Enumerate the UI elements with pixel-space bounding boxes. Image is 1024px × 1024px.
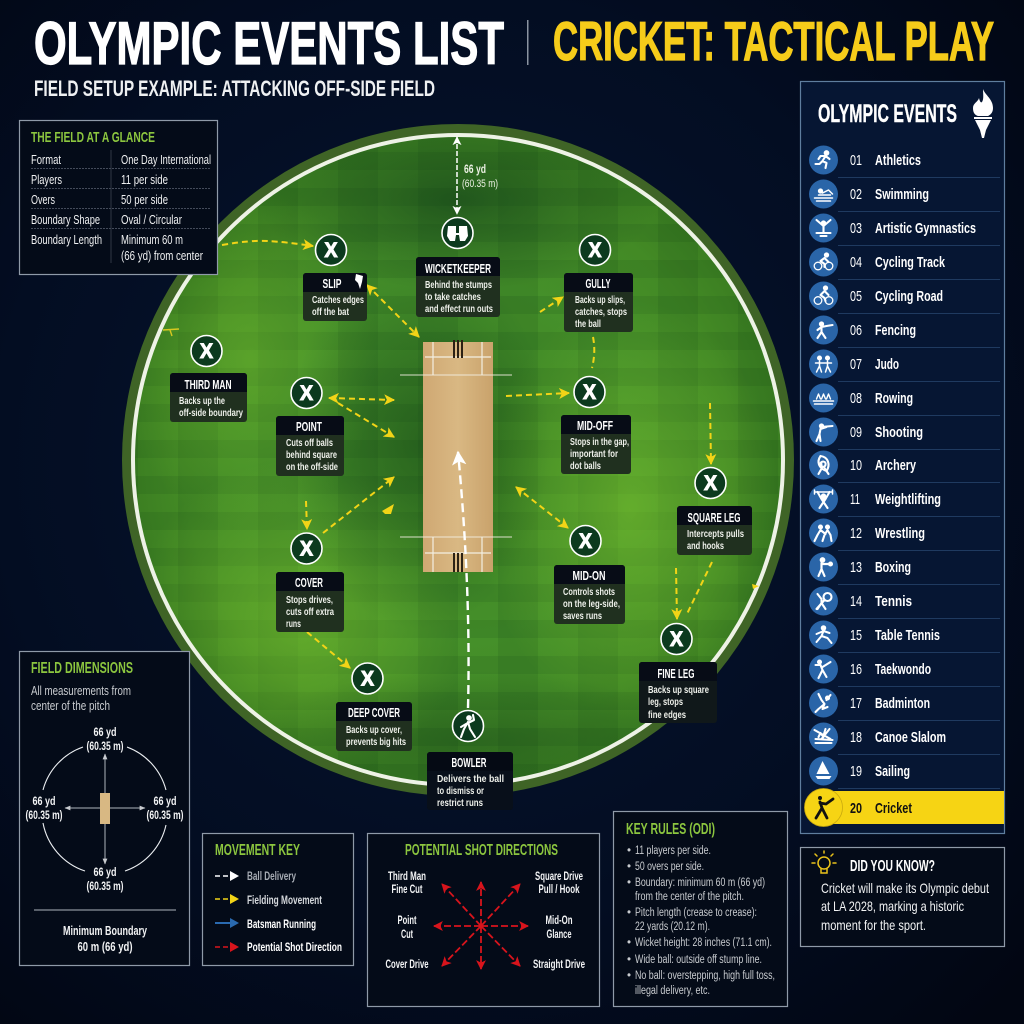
panel: key rules: Wicket height: 28 inches (71.1 cm). xyxy=(635,937,772,949)
panel: potential shot directions: POTENTIAL SHOT DIRECTIONS xyxy=(405,842,558,859)
fielder: fine leg xyxy=(639,624,717,723)
fielder: cover: cuts off extra xyxy=(286,606,334,618)
panel: key rules: • xyxy=(627,877,631,889)
fielder: cover: runs xyxy=(286,618,301,630)
event: table tennis: 15 xyxy=(850,627,862,644)
panel: the field at a glance: Oval / Circular xyxy=(121,213,182,227)
panel: the field at a glance: One Day International xyxy=(121,153,211,167)
panel: the field at a glance: (66 yd) from center xyxy=(121,249,203,263)
panel: key rules: • xyxy=(627,907,631,919)
fielder: square leg: X xyxy=(704,472,717,495)
fielder: point: behind square xyxy=(286,449,337,461)
event: fencing: Fencing xyxy=(875,322,916,339)
panel: key rules: KEY RULES (ODI) xyxy=(626,821,715,838)
fielder: fine leg: leg, stops xyxy=(648,696,683,708)
fielder: bowler xyxy=(427,710,513,810)
dimension diagram: (60.35 m) xyxy=(26,810,63,822)
event: fencing xyxy=(809,316,916,344)
fielder: bowler: restrict runs xyxy=(437,797,483,809)
fielder: point: Cuts off balls xyxy=(286,437,333,449)
panel: potential shot directions: Mid-On xyxy=(546,913,572,927)
fielder: slip: off the bat xyxy=(312,306,349,318)
fielder: bowler: to dismiss or xyxy=(437,785,484,797)
event: shooting: 09 xyxy=(850,424,862,441)
dimension diagram: Minimum Boundary xyxy=(63,924,147,938)
title xyxy=(34,10,994,77)
ball delivery arrow xyxy=(458,452,469,708)
fielder: slip xyxy=(303,234,367,321)
event: tennis xyxy=(809,586,912,616)
panel: key rules: • xyxy=(627,845,631,857)
icon: olympic torch xyxy=(973,89,993,138)
panel: key rules: • xyxy=(627,861,631,873)
event: fencing: 06 xyxy=(850,322,862,339)
fielder: gully: X xyxy=(588,239,602,262)
event: badminton: 17 xyxy=(850,695,862,712)
event: wrestling xyxy=(809,518,925,548)
panel: key rules: • xyxy=(627,970,631,982)
event: table tennis: Table Tennis xyxy=(875,627,940,644)
event: weightlifting: 11 xyxy=(850,491,860,508)
event: athletics xyxy=(809,146,921,174)
panel: did you know: DID YOU KNOW? xyxy=(850,858,935,875)
fielder: third man: X xyxy=(200,340,213,363)
panel: key rules: 11 players per side. xyxy=(635,845,711,857)
fielder: mid-on: saves runs xyxy=(563,610,602,622)
fielder: wicketkeeper: WICKETKEEPER xyxy=(425,261,491,276)
event: swimming xyxy=(809,180,929,208)
panel: potential shot directions: Third Man xyxy=(388,869,426,883)
event: artistic gymnastics: 03 xyxy=(850,220,862,237)
panel: field dimensions: All measurements from xyxy=(31,684,131,698)
panel: potential shot directions: Square Drive xyxy=(535,869,583,883)
fielder: point: X xyxy=(300,382,313,405)
fielder: mid-off: dot balls xyxy=(570,460,601,472)
fielder: square leg xyxy=(677,468,752,555)
event: tennis: 14 xyxy=(850,593,862,610)
panel: key rules: • xyxy=(627,954,631,966)
panel: movement key: Potential Shot Direction xyxy=(247,942,342,954)
fielder: point: POINT xyxy=(296,419,322,434)
fielder: wicketkeeper: to take catches xyxy=(425,291,481,303)
event: artistic gymnastics: Artistic Gymnastics xyxy=(875,220,976,237)
event: shooting xyxy=(809,418,923,446)
dimension diagram: 60 m (66 yd) xyxy=(78,940,132,954)
event: cycling track xyxy=(809,248,945,276)
event: cycling road xyxy=(809,282,943,310)
event: canoe slalom: Canoe Slalom xyxy=(875,729,946,746)
panel: potential shot directions: Straight Drive xyxy=(533,957,585,971)
boundary distance arrow xyxy=(457,137,498,214)
dimension diagram: (60.35 m) xyxy=(146,810,184,822)
fielder: mid-on xyxy=(554,526,625,624)
event: cricket highlighted: Cricket xyxy=(875,800,912,817)
fielder: mid-off: important for xyxy=(570,448,618,460)
panel: potential shot directions: Point xyxy=(398,913,416,927)
fielder: mid-off: Stops in the gap, xyxy=(570,436,629,448)
event: judo xyxy=(809,350,899,378)
fielder: slip: X xyxy=(324,239,338,262)
panel: the field at a glance: Boundary Length xyxy=(31,233,102,247)
event: taekwondo: 16 xyxy=(850,661,862,678)
panel: key rules: • xyxy=(627,937,631,949)
panel: potential shot directions: Glance xyxy=(546,927,572,941)
fielder: point xyxy=(276,378,344,476)
panel: key rules: illegal delivery, etc. xyxy=(635,985,710,997)
fielder: gully: Backs up slips, xyxy=(575,294,625,306)
panel: key rules: Pitch length (crease to crease): xyxy=(635,907,757,919)
event: rowing: 08 xyxy=(850,390,862,407)
fielder: deep cover: Backs up cover, xyxy=(346,724,402,736)
panel: potential shot directions: Cut xyxy=(401,927,413,941)
panel: movement key: Batsman Running xyxy=(247,919,316,931)
panel: the field at a glance: Boundary Shape xyxy=(31,213,100,227)
panel: potential shot directions xyxy=(368,834,600,1006)
dimension diagram xyxy=(26,725,184,954)
panel: key rules xyxy=(614,812,788,1006)
fielder: wicketkeeper xyxy=(416,218,500,317)
event: tennis: Tennis xyxy=(875,593,912,610)
panel: potential shot directions: Cover Drive xyxy=(386,957,429,971)
cricket field xyxy=(120,110,800,810)
dimension diagram: 66 yd xyxy=(94,725,116,739)
fielder: gully: catches, stops xyxy=(575,306,627,318)
event: badminton: Badminton xyxy=(875,695,930,712)
fielder: deep cover xyxy=(336,663,412,751)
event: swimming: 02 xyxy=(850,186,862,203)
fielder: fine leg: FINE LEG xyxy=(658,666,694,681)
dimension diagram: 66 yd xyxy=(94,865,116,879)
event: taekwondo: Taekwondo xyxy=(875,661,931,678)
event: weightlifting: Weightlifting xyxy=(875,491,941,508)
event: swimming: Swimming xyxy=(875,186,929,203)
event: rowing xyxy=(809,384,913,412)
event: cycling road: Cycling Road xyxy=(875,288,943,305)
event: judo: Judo xyxy=(875,356,899,373)
fielder: third man: off-side boundary xyxy=(179,407,243,419)
event: canoe slalom: 18 xyxy=(850,729,862,746)
fielder: point: on the off-side xyxy=(286,461,338,473)
fielder: cover: Stops drives, xyxy=(286,594,333,606)
event: cycling track: 04 xyxy=(850,254,862,271)
fielder: cover: X xyxy=(300,538,313,560)
panel: field dimensions: FIELD DIMENSIONS xyxy=(31,660,133,677)
panel: key rules: Wide ball: outside off stump line. xyxy=(635,954,762,966)
event: table tennis xyxy=(809,620,940,650)
panel: field dimensions: center of the pitch xyxy=(31,699,110,713)
event: artistic gymnastics xyxy=(809,214,976,242)
event: boxing xyxy=(809,552,911,582)
event: archery: Archery xyxy=(875,457,916,474)
event: cycling road: 05 xyxy=(850,288,862,305)
fielder: deep cover: DEEP COVER xyxy=(348,705,400,720)
panel: the field at a glance: Players xyxy=(31,173,62,187)
event: cricket highlighted xyxy=(804,788,1004,826)
fielder: bowler: Delivers the ball xyxy=(437,773,504,785)
icon: light bulb xyxy=(812,851,836,873)
panel: key rules: 50 overs per side. xyxy=(635,861,704,873)
fielder: wicketkeeper: and effect run outs xyxy=(425,303,493,315)
fielder: gully: GULLY xyxy=(586,276,611,291)
fielder: mid-off xyxy=(561,376,631,474)
event: canoe slalom xyxy=(809,722,946,752)
panel: the field at a glance: Format xyxy=(31,153,61,167)
pitch xyxy=(400,340,512,572)
fielder: bowler: BOWLER xyxy=(452,755,487,770)
fielder: wicketkeeper: Behind the stumps xyxy=(425,279,492,291)
movement arrows xyxy=(163,241,759,668)
panel: the field at a glance: Overs xyxy=(31,193,55,207)
event: wrestling: Wrestling xyxy=(875,525,925,542)
event: cycling track: Cycling Track xyxy=(875,254,945,271)
fielder: square leg: SQUARE LEG xyxy=(688,510,740,525)
event: boxing: 13 xyxy=(850,559,862,576)
dimension diagram: (60.35 m) xyxy=(86,741,124,753)
panel: did you know xyxy=(800,848,1004,946)
event: sailing: 19 xyxy=(850,763,862,780)
fielder: fine leg: Backs up square xyxy=(648,684,709,696)
panel: key rules: from the center of the pitch. xyxy=(635,891,744,903)
fielder: mid-on: on the leg-side, xyxy=(563,598,620,610)
panel: key rules: 22 yards (20.12 m). xyxy=(635,921,710,933)
boundary distance arrow: 66 yd xyxy=(464,162,486,176)
event: sailing xyxy=(809,756,910,786)
event: sailing: Sailing xyxy=(875,763,910,780)
event: archery: 10 xyxy=(850,457,862,474)
fielder: cover xyxy=(276,533,344,632)
fielder: mid-on: X xyxy=(579,530,592,553)
fielder: square leg: and hooks xyxy=(687,540,724,552)
event: shooting: Shooting xyxy=(875,424,923,441)
dimension diagram: 66 yd xyxy=(32,794,56,808)
panel: movement key: Fielding Movement xyxy=(247,895,322,907)
fielder: third man xyxy=(170,336,247,422)
event: athletics: Athletics xyxy=(875,152,921,169)
boundary distance arrow: (60.35 m) xyxy=(462,178,498,190)
panel: olympic events xyxy=(800,82,1004,834)
panel: potential shot directions: Fine Cut xyxy=(392,882,422,896)
fielder: mid-on: Controls shots xyxy=(563,586,615,598)
panel: movement key xyxy=(202,834,354,966)
event: rowing: Rowing xyxy=(875,390,913,407)
event: cricket highlighted: 20 xyxy=(850,800,862,817)
event: boxing: Boxing xyxy=(875,559,911,576)
fielder: fine leg: X xyxy=(670,628,683,651)
panel: the field at a glance: Minimum 60 m xyxy=(121,233,183,247)
event: taekwondo xyxy=(809,654,931,684)
fielder: slip: Catches edges xyxy=(312,294,364,306)
event: wrestling: 12 xyxy=(850,525,862,542)
fielder: deep cover: X xyxy=(361,668,374,690)
panel: movement key: MOVEMENT KEY xyxy=(215,842,300,859)
panel: the field at a glance xyxy=(20,120,218,274)
fielder: mid-off: MID-OFF xyxy=(577,418,613,433)
fielder: fine leg: fine edges xyxy=(648,709,686,721)
panel: key rules: No ball: overstepping, high full toss, xyxy=(635,970,775,982)
panel: the field at a glance: THE FIELD AT A GLANCE xyxy=(31,129,155,146)
dimension diagram: 66 yd xyxy=(154,794,176,808)
fielder: deep cover: prevents big hits xyxy=(346,736,406,748)
icon: gloves xyxy=(447,226,468,241)
panel: did you know: moment for the sport. xyxy=(821,917,926,933)
panel: the field at a glance: 11 per side xyxy=(121,173,168,187)
fielder: third man: THIRD MAN xyxy=(184,377,232,392)
panel: field dimensions xyxy=(20,652,190,966)
fielder: gully xyxy=(564,234,633,332)
icon: bowler figure xyxy=(461,715,475,737)
event: athletics: 01 xyxy=(850,152,862,169)
fielder: mid-off: X xyxy=(583,381,596,404)
event: archery xyxy=(809,450,916,480)
panel: did you know: at LA 2028, marking a historic xyxy=(821,898,964,914)
fielder: mid-on: MID-ON xyxy=(572,568,606,583)
fielder: slip: SLIP xyxy=(322,276,342,291)
shot direction arrows xyxy=(434,882,528,969)
fielder: cover: COVER xyxy=(295,575,323,590)
fielder: third man: Backs up the xyxy=(179,395,225,407)
panel: movement key: Ball Delivery xyxy=(247,871,296,883)
title: OLYMPIC EVENTS LIST xyxy=(34,10,504,77)
event: badminton xyxy=(809,688,930,718)
fielder: gully: the ball xyxy=(575,318,601,330)
event: judo: 07 xyxy=(850,356,862,373)
panel: key rules: Boundary: minimum 60 m (66 yd) xyxy=(635,877,765,889)
panel: potential shot directions: Pull / Hook xyxy=(538,882,580,896)
subtitle: FIELD SETUP EXAMPLE: ATTACKING OFF-SIDE FIELD xyxy=(34,76,435,101)
fielder: square leg: Intercepts pulls xyxy=(687,528,744,540)
dimension diagram: (60.35 m) xyxy=(86,881,124,893)
panel: the field at a glance: 50 per side xyxy=(121,193,168,207)
event: weightlifting xyxy=(809,484,941,514)
